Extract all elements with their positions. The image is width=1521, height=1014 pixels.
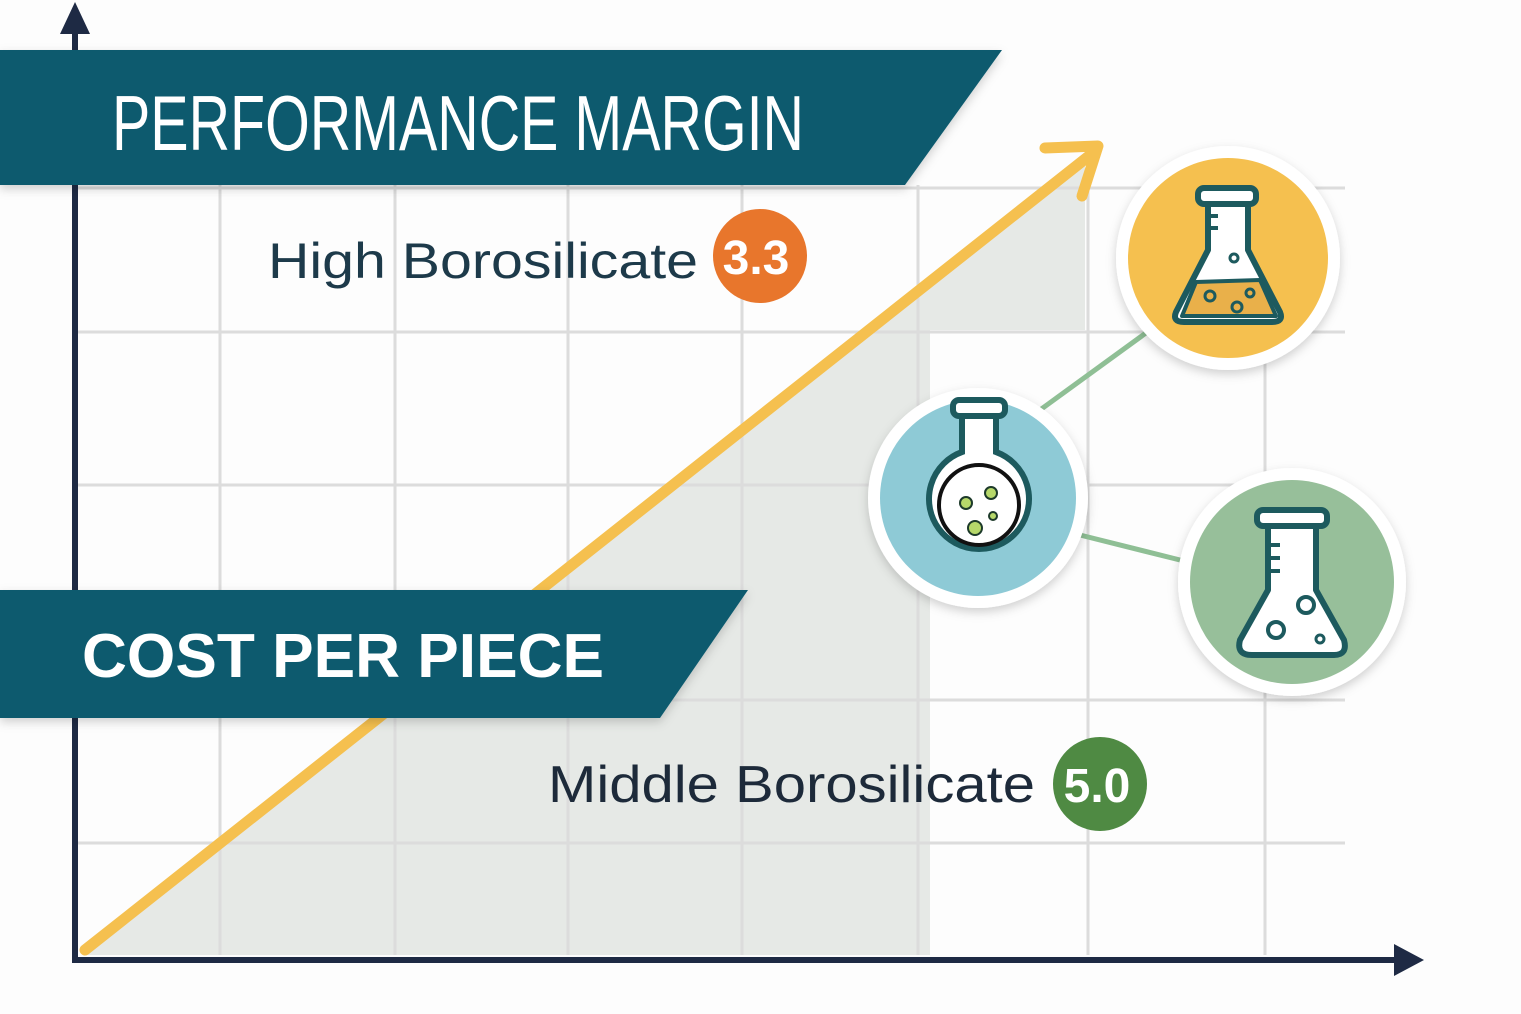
connector lines bbox=[1040, 330, 1180, 560]
label: high borosilicate 3.3 bbox=[268, 209, 807, 303]
label: middle borosilicate 5.0: 5.0 bbox=[1064, 760, 1130, 813]
icon: yellow erlenmeyer flask bbox=[1116, 146, 1340, 370]
banner: cost per piece: COST PER PIECE bbox=[82, 622, 604, 691]
label: middle borosilicate 5.0: Middle Borosilicate bbox=[548, 756, 1035, 814]
trend arrow bbox=[85, 146, 1098, 950]
banner: cost per piece bbox=[0, 590, 748, 718]
banner: performance margin bbox=[0, 50, 1002, 185]
label: high borosilicate 3.3: 3.3 bbox=[723, 232, 789, 285]
label: middle borosilicate 5.0 bbox=[548, 737, 1147, 831]
label: high borosilicate 3.3: High Borosilicate bbox=[268, 233, 698, 289]
icon: green beaker flask bbox=[1178, 468, 1406, 696]
banner: performance margin: PERFORMANCE MARGIN bbox=[112, 79, 804, 167]
icon: blue round flask bbox=[868, 388, 1088, 608]
shaded area under trend bbox=[85, 159, 1085, 955]
